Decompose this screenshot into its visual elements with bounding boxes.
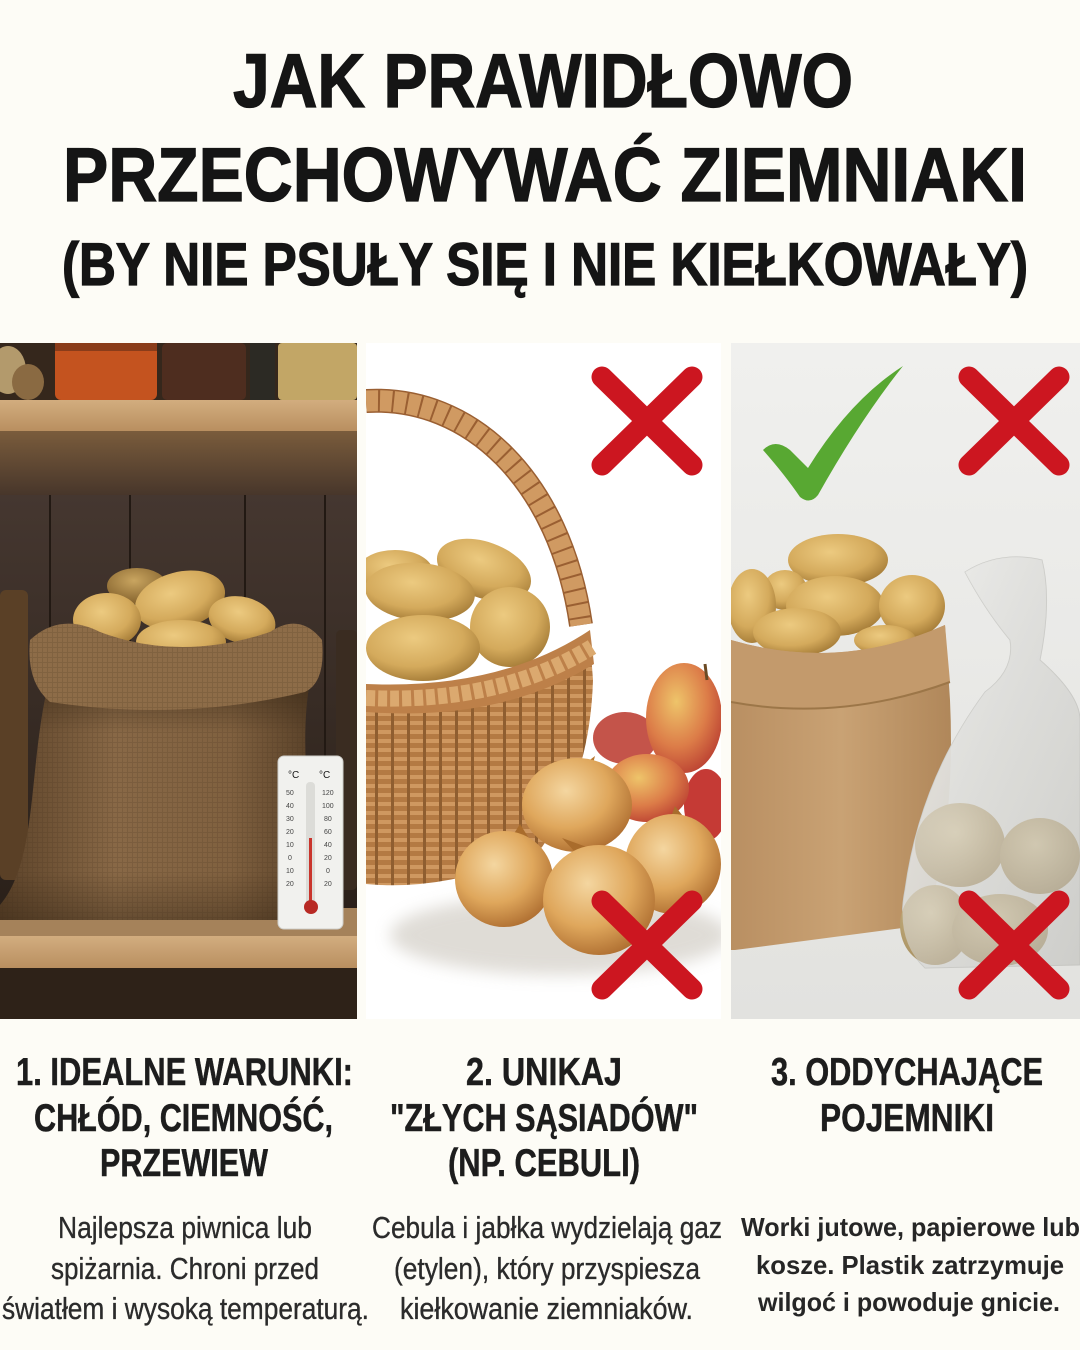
icon: red cross top [602, 377, 692, 465]
onions [455, 756, 721, 955]
thermometer: 20 [324, 881, 332, 888]
thermometer: 10 [286, 842, 294, 849]
heading: column 2: 2. UNIKAJ [466, 1051, 622, 1094]
thermometer: 40 [286, 803, 294, 810]
thermometer: °C [319, 770, 330, 781]
heading: column 2: (NP. CEBULI) [448, 1142, 640, 1185]
basket handle [366, 401, 581, 625]
thermometer: 80 [324, 816, 332, 823]
icon: red cross bottom [602, 901, 692, 989]
heading: column 1: 1. IDEALNE WARUNKI: [16, 1051, 353, 1094]
burlap sack [0, 624, 330, 920]
icon: green check mark [763, 366, 903, 501]
title: JAK PRAWIDŁOWO [233, 39, 853, 124]
heading: column 2 [390, 1051, 698, 1185]
thermometer: 20 [286, 829, 294, 836]
thermometer: 30 [286, 816, 294, 823]
text block: column 2: (etylen), który przyspiesza [394, 1251, 701, 1286]
thermometer: 10 [286, 868, 294, 875]
text block: column 1: spiżarnia. Chroni przed [51, 1251, 319, 1286]
thermometer: 40 [324, 842, 332, 849]
potatoes in paper bag [728, 534, 945, 656]
thermometer: 20 [286, 881, 294, 888]
thermometer: 100 [322, 803, 334, 810]
icon: red cross bottom [969, 901, 1059, 989]
potatoes in basket [366, 538, 550, 681]
potatoes in sack [73, 568, 276, 647]
back wall [0, 495, 357, 915]
pantry shelf with jars [0, 343, 357, 497]
paper bag [731, 625, 951, 950]
text block: column 3: wilgoć i powoduje gnicie. [757, 1287, 1060, 1317]
heading: column 3 [771, 1051, 1043, 1140]
icon: red cross top [969, 377, 1059, 465]
heading: column 1: CHŁÓD, CIEMNOŚĆ, [34, 1096, 333, 1140]
panel: burlap sack in pantry [0, 343, 357, 1019]
thermometer: 0 [326, 868, 330, 875]
heading: column 2: "ZŁYCH SĄSIADÓW" [390, 1096, 698, 1140]
plastic bag [900, 557, 1080, 968]
lower shelf [0, 908, 357, 1019]
text block: column 1: światłem i wysoką temperaturą. [2, 1291, 369, 1326]
text block: column 3 [741, 1212, 1080, 1317]
thermometer: 50 [286, 790, 294, 797]
thermometer: 120 [322, 790, 334, 797]
text block: column 2 [372, 1210, 722, 1326]
thermometer: 60 [324, 829, 332, 836]
thermometer [278, 756, 343, 929]
title [62, 39, 1028, 298]
text block: column 3: kosze. Plastik zatrzymuje [756, 1250, 1064, 1280]
text block: column 1: Najlepsza piwnica lub [58, 1210, 312, 1245]
text block: column 2: Cebula i jabłka wydzielają gaz [372, 1210, 722, 1245]
thermometer: 20 [324, 855, 332, 862]
heading: column 1 [16, 1051, 353, 1185]
soft shadow [390, 895, 730, 975]
apples [593, 663, 728, 841]
text block: column 1 [2, 1210, 369, 1326]
text block: column 2: kiełkowanie ziemniaków. [400, 1291, 693, 1326]
heading: column 1: PRZEWIEW [100, 1142, 268, 1185]
panel: paper bag and plastic bag [728, 343, 1080, 1019]
panel: basket with onions and apples [357, 343, 730, 1019]
heading: column 3: POJEMNIKI [820, 1097, 994, 1140]
wicker basket [366, 630, 594, 885]
thermometer: °C [288, 770, 299, 781]
thermometer: 0 [288, 855, 292, 862]
